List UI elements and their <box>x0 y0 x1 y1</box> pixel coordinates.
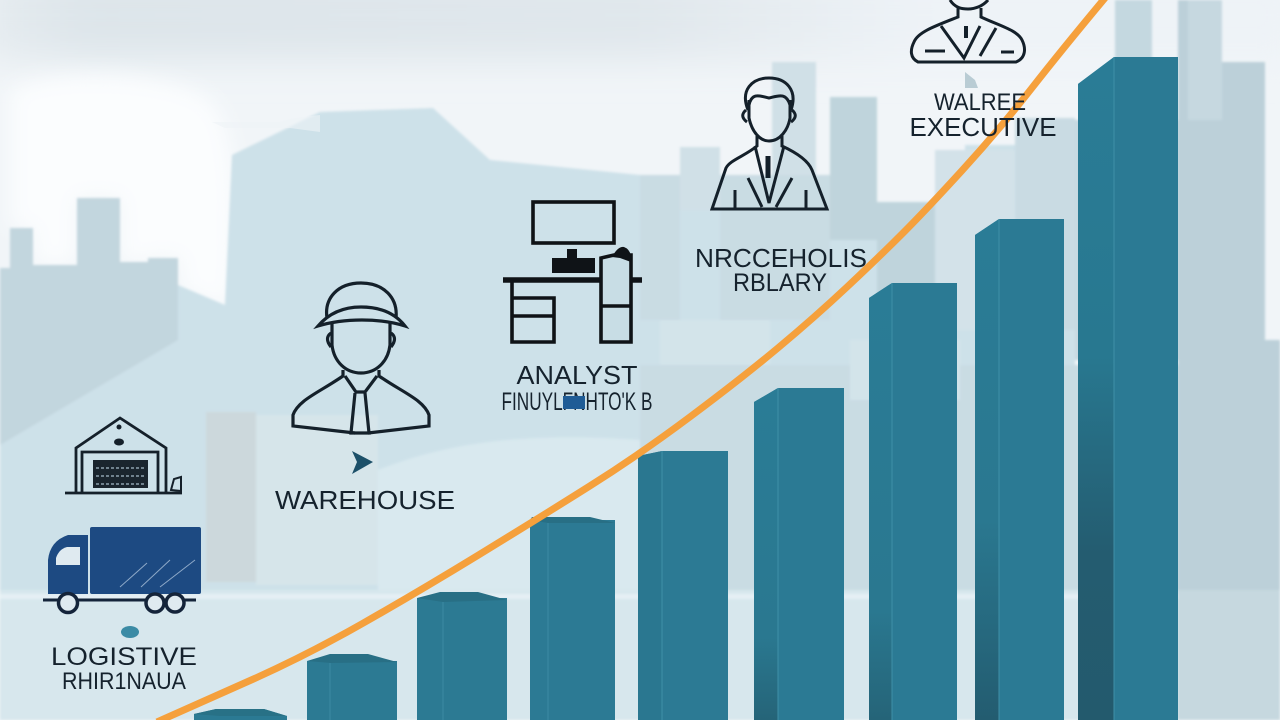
label: manager role: NRCCEHOLIS <box>695 243 867 273</box>
bar 1 <box>194 709 287 720</box>
bar 9 <box>1078 57 1178 720</box>
icon: delivery truck <box>43 527 201 612</box>
bar 7 <box>869 283 957 720</box>
bar 4 <box>530 517 615 720</box>
label: executive role: EXECUTIVE <box>910 112 1056 142</box>
icon: manager in suit <box>712 78 827 209</box>
label: manager role: RBLARY <box>733 269 827 297</box>
icon: warehouse worker with cap <box>293 283 429 433</box>
bar 6 <box>754 388 844 720</box>
icon: executive in suit <box>911 0 1024 62</box>
label: analyst role: FINUYLFNHTO'K B <box>502 388 652 416</box>
icon: warehouse <box>65 418 182 493</box>
icon: analyst desk and monitor <box>503 202 642 342</box>
label: executive role: WALREE <box>934 89 1026 116</box>
label: executive role <box>910 89 1056 142</box>
icon: small arrow <box>352 451 373 474</box>
label: logistics role <box>51 643 197 695</box>
label: logistics role: RHIR1NAUA <box>62 668 186 695</box>
label: manager role <box>695 243 867 297</box>
label: logistics role: LOGISTIVE <box>51 643 197 671</box>
label: analyst role <box>502 360 652 416</box>
bar 2 <box>307 654 397 720</box>
label: analyst role: ANALYST <box>516 360 638 390</box>
bar chart: rising teal columns <box>194 57 1178 720</box>
bar 8 <box>975 219 1064 720</box>
bar 3 <box>417 592 507 720</box>
label: warehouse: WAREHOUSE <box>275 485 455 515</box>
growth curve: orange line <box>157 0 1110 720</box>
bar 5 <box>638 451 728 720</box>
icon: teal dot <box>121 626 139 638</box>
decoration marker below executive <box>965 72 978 88</box>
